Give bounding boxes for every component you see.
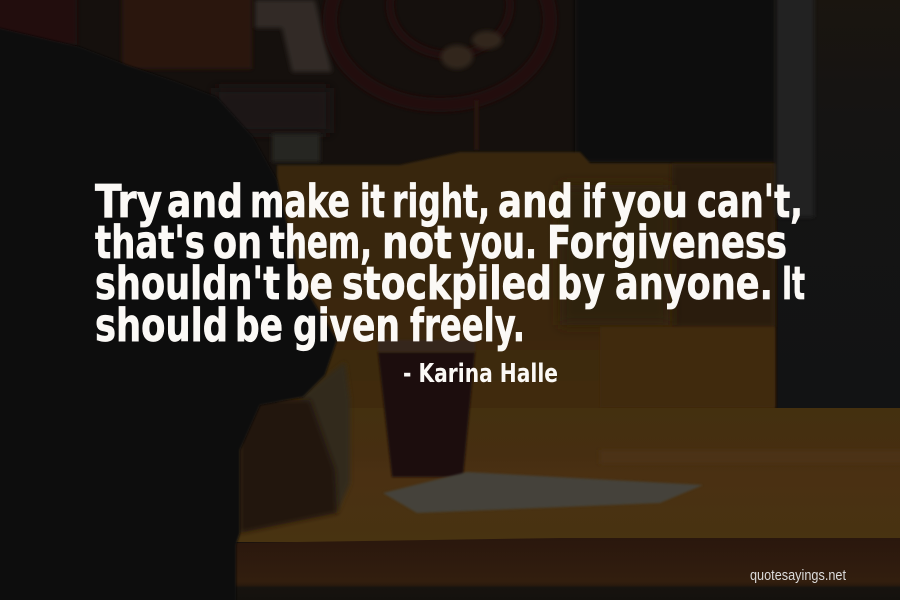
dark back wall [575,0,775,162]
line 2 [95,216,787,269]
wheel stand [474,100,479,150]
wood panel [122,0,252,69]
mustard knobs [441,31,502,69]
jar [240,400,337,533]
line 1: you [612,175,688,228]
line 1: Try [95,175,162,228]
line 2: you. [460,216,537,269]
line 1: can't, [697,175,803,228]
table front [230,538,900,600]
grey column [776,0,814,217]
line 3: by [557,257,605,310]
line 3: anyone. [615,257,773,310]
line 1 [95,175,803,228]
line 4: given [293,299,400,352]
line 3: be [285,257,333,310]
dark silhouette [0,27,337,600]
curtain [0,0,77,45]
line 2: Forgiveness [547,216,787,269]
line 1: and [498,175,573,228]
line 4: freely. [410,299,525,352]
wall behind table [277,152,775,410]
line 3 [95,257,805,310]
napkin [383,472,703,513]
line 2: them, [270,216,372,269]
line 1: and [167,175,243,228]
wall mid section [560,185,670,325]
table stripe [600,450,900,464]
line 4: should [95,299,228,352]
table top [230,408,900,542]
watermark: quotesayings.net [750,567,847,584]
line 4 [95,299,525,352]
line 4: be [235,299,283,352]
vase [255,0,332,72]
jar edge [300,362,350,513]
glass [378,352,475,477]
line 2: on [213,216,262,269]
line 2: that's [95,216,205,269]
line 1: it [360,175,385,228]
lower shelf [215,88,330,133]
quote text [95,175,805,352]
line 3: shouldn't [95,257,280,310]
small white object [272,134,320,162]
wall lower band [600,327,775,407]
right dark block [778,0,900,408]
line 3: stockpiled [342,257,552,310]
wheel on wall [330,0,550,105]
author: - Karina Halle [403,359,558,389]
line 3: It [782,257,805,310]
line 1: if [582,175,605,228]
glass rim [378,340,475,352]
line 2: not [382,216,452,269]
line 1: right, [392,175,490,228]
line 1: make [250,175,350,228]
wall darker section [672,164,775,327]
